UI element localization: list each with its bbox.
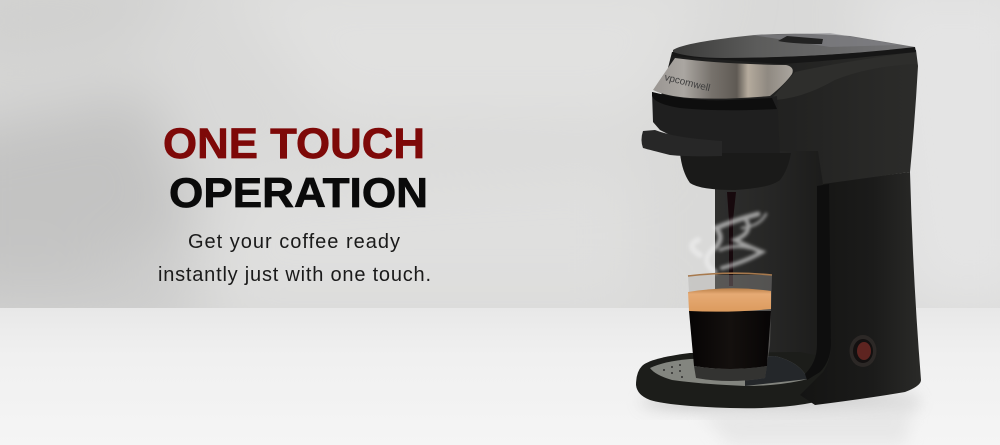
description line two: instantly just with one touch. bbox=[158, 264, 431, 286]
power button bbox=[850, 335, 876, 367]
back column bbox=[715, 148, 832, 372]
head collar bbox=[652, 92, 777, 110]
glass bottom bbox=[694, 366, 767, 381]
floor reflection bbox=[700, 395, 915, 445]
brew basket bbox=[680, 153, 791, 190]
heading: operation: OPERATION bbox=[169, 169, 428, 216]
column edge strip bbox=[805, 184, 831, 380]
coffee stream bbox=[727, 192, 736, 286]
lid panel bbox=[752, 33, 900, 47]
title and description bbox=[158, 120, 431, 286]
description line one: Get your coffee ready bbox=[188, 231, 400, 253]
glass of coffee bbox=[688, 273, 772, 381]
upper body highlight bbox=[770, 52, 917, 100]
basket handle bbox=[642, 130, 722, 156]
coffee bbox=[689, 311, 771, 369]
drip tray base bbox=[636, 352, 840, 408]
drip tray grate bbox=[650, 356, 808, 386]
coffee machine bbox=[636, 33, 921, 445]
steam bbox=[692, 214, 766, 272]
lid rim bbox=[672, 47, 916, 64]
lower body bbox=[800, 172, 921, 405]
lid bbox=[673, 34, 915, 58]
glass body bbox=[688, 275, 772, 381]
floor shadow bbox=[640, 393, 920, 411]
background wall bbox=[0, 0, 1000, 330]
brand name: vpcomwell bbox=[663, 72, 711, 94]
crema bbox=[688, 288, 771, 312]
glass rim bbox=[688, 273, 772, 276]
silver band bbox=[653, 58, 793, 99]
heading: one touch: ONE TOUCH bbox=[163, 120, 425, 168]
dispenser head bbox=[652, 92, 780, 158]
background floor bbox=[0, 308, 1000, 445]
upper body bbox=[660, 46, 918, 184]
lid switch bbox=[778, 36, 823, 44]
